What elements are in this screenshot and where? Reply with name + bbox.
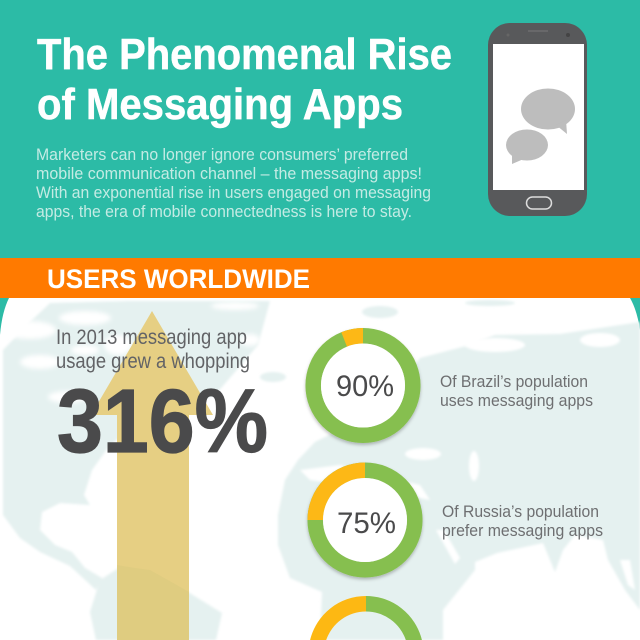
Brazil label (440, 373, 593, 410)
title: of Messaging Apps (37, 80, 403, 129)
donut: third statistic, cropped (310, 596, 422, 640)
orange section banner (0, 258, 640, 298)
Russia label: prefer messaging apps (442, 522, 603, 540)
title: The Phenomenal Rise (37, 30, 452, 79)
donut: Brazil 90% (313, 328, 413, 435)
section heading: USERS WORLDWIDE (47, 264, 310, 294)
316 percent: 316% (57, 372, 268, 472)
donut: Russia 75%: 75% (337, 507, 396, 540)
world map background (3, 300, 640, 640)
panel: users worldwide (0, 298, 640, 640)
Russia label: Of Russia’s population (442, 503, 599, 521)
headline statistic: In 2013 messaging app (56, 326, 247, 349)
intro paragraph: mobile communication channel – the messaging apps! (36, 165, 422, 183)
map inland seas (300, 333, 635, 590)
intro paragraph: With an exponential rise in users engaged on messaging (36, 184, 431, 202)
Brazil label: uses messaging apps (440, 392, 593, 410)
intro paragraph (36, 146, 431, 221)
intro paragraph: apps, the era of mobile connectedness is here to stay. (36, 203, 412, 221)
header panel (0, 0, 640, 340)
headline statistic (56, 326, 268, 472)
headline statistic: usage grew a whopping (56, 350, 250, 373)
donut: Russia 75% (308, 462, 415, 570)
map sea and ice cut-outs (4, 302, 260, 403)
icon: smartphone with chat bubbles (488, 23, 587, 216)
title (37, 30, 452, 129)
arrow (91, 311, 213, 640)
Russia label (442, 503, 603, 540)
Brazil label: Of Brazil’s population (440, 373, 588, 391)
donut: Brazil 90%: 90% (336, 370, 394, 403)
intro paragraph: Marketers can no longer ignore consumers’ preferred (36, 146, 408, 164)
